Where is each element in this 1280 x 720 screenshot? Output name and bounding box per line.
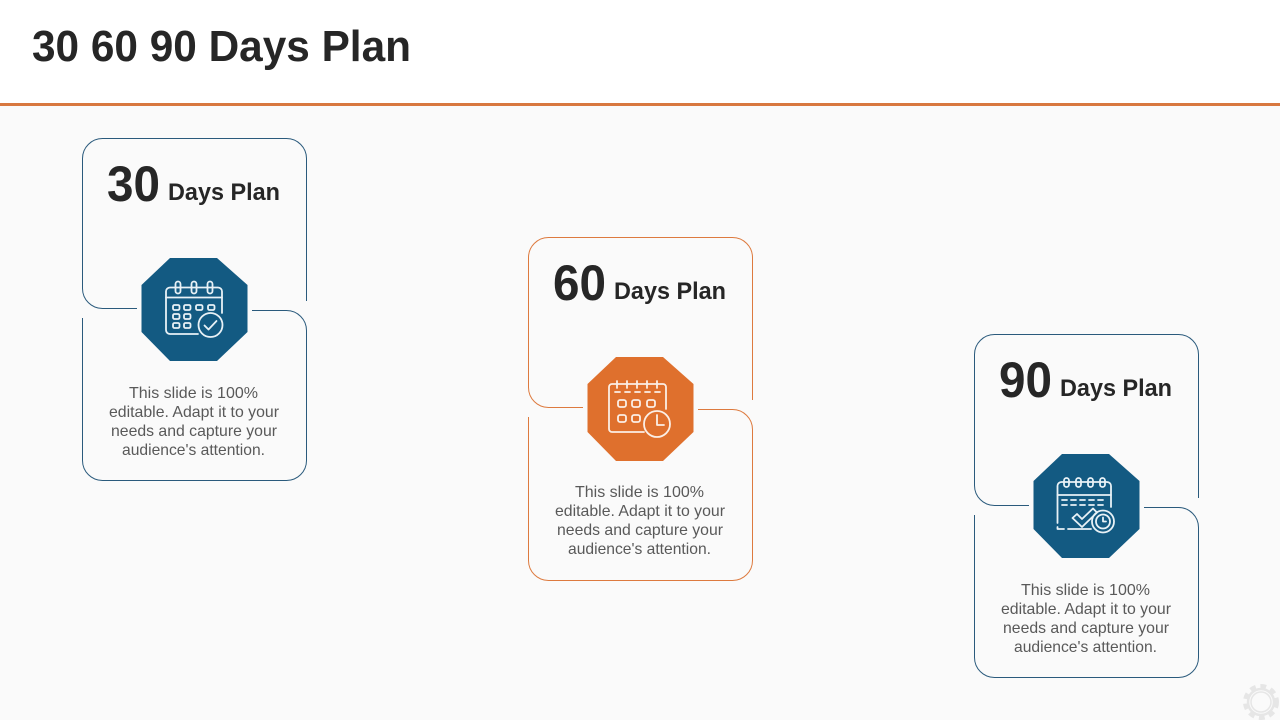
heading: 30 days plan <box>107 156 280 212</box>
body text: This slide is 100% <box>575 484 704 501</box>
heading: 90 days plan: Days Plan <box>1060 375 1172 402</box>
card outline <box>528 238 752 580</box>
heading: 90 days plan <box>999 352 1172 408</box>
icon: octagon calendar with clock <box>588 357 694 461</box>
body text: This slide is 100% <box>129 385 258 402</box>
card outline <box>974 334 1198 678</box>
body text: audience's attention. <box>122 442 265 459</box>
body text: This slide is 100% <box>1021 582 1150 599</box>
header band <box>0 0 1280 103</box>
body text: editable. Adapt it to your <box>109 404 280 421</box>
body text: audience's attention. <box>1014 639 1157 656</box>
title: 30 60 90 Days Plan <box>32 22 411 71</box>
card outline <box>82 138 306 480</box>
panel: 30 days plan <box>82 138 306 480</box>
body text <box>555 484 726 558</box>
header rule <box>0 103 1280 106</box>
body text: needs and capture your <box>1003 620 1170 637</box>
heading: 30 days plan: Days Plan <box>168 179 280 206</box>
icon: octagon calendar with check <box>142 258 248 361</box>
heading: 60 days plan <box>553 255 726 311</box>
heading: 30 days plan: 30 <box>107 156 160 212</box>
body text <box>1001 582 1172 656</box>
heading: 60 days plan: Days Plan <box>614 278 726 305</box>
body text: needs and capture your <box>111 423 278 440</box>
icon: octagon calendar with check and clock <box>1034 454 1140 558</box>
panel: 90 days plan <box>974 334 1198 678</box>
body text: editable. Adapt it to your <box>1001 601 1172 618</box>
heading: 60 days plan: 60 <box>553 255 606 311</box>
body text: editable. Adapt it to your <box>555 503 726 520</box>
body text: audience's attention. <box>568 541 711 558</box>
heading: 90 days plan: 90 <box>999 352 1052 408</box>
body text <box>109 385 280 459</box>
body text: needs and capture your <box>557 522 724 539</box>
panel: 60 days plan <box>528 238 752 580</box>
icon: corner gear <box>1246 687 1276 717</box>
